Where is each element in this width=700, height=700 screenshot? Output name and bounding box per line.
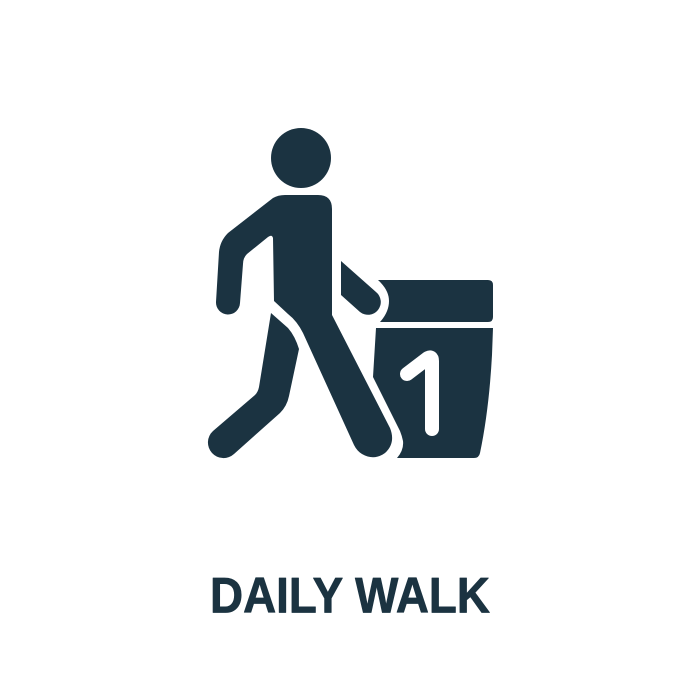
title: DAILY WALK (210, 568, 490, 624)
icon: walking person with calendar (208, 128, 493, 458)
calendar top (378, 280, 493, 322)
front arm (341, 261, 381, 315)
head (271, 128, 331, 188)
back leg (208, 313, 299, 458)
number 1 (407, 357, 432, 429)
torso, back arm and front leg (216, 195, 392, 457)
calendar body with number (373, 328, 493, 458)
